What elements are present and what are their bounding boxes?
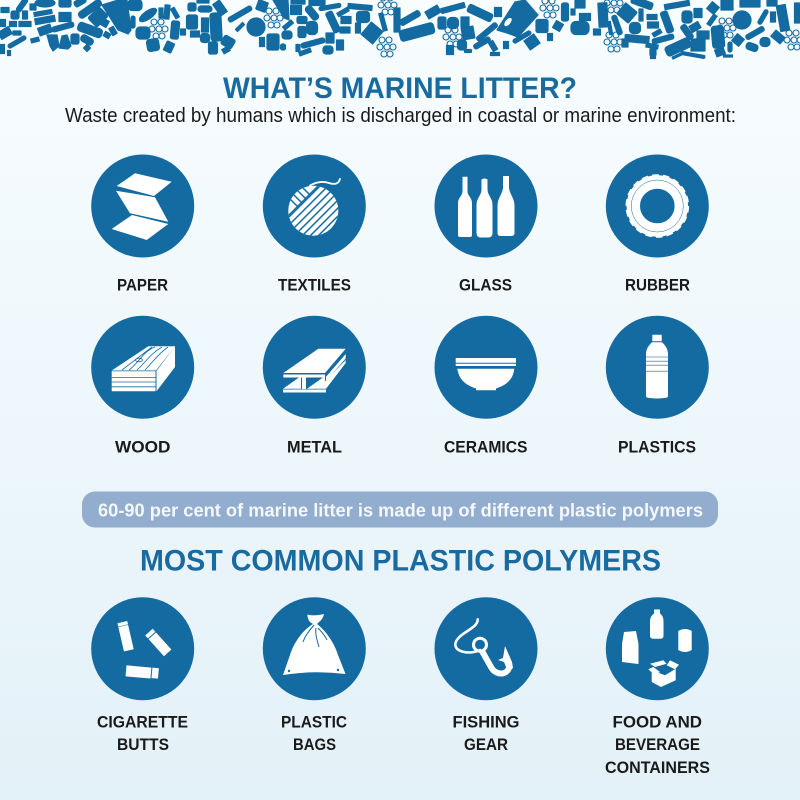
icon: plastic bags bbox=[263, 597, 366, 700]
icon: ceramics bbox=[434, 316, 538, 419]
label: food and beverage containers bbox=[605, 714, 710, 777]
icon: glass bbox=[434, 154, 538, 258]
icon: metal bbox=[263, 316, 366, 419]
icon: textiles bbox=[262, 154, 366, 258]
label: wood: WOOD bbox=[115, 438, 171, 456]
label: glass: GLASS bbox=[459, 276, 512, 294]
label: plastics: PLASTICS bbox=[618, 438, 696, 456]
litter border bbox=[0, 0, 800, 59]
label: cigarette butts: CIGARETTE bbox=[97, 714, 188, 732]
label: fishing gear: GEAR bbox=[464, 736, 508, 754]
label: cigarette butts bbox=[97, 714, 188, 754]
subtitle: Waste created by humans which is discharged in coastal or marine environment: bbox=[65, 105, 736, 127]
callout pill: 60-90 per cent of marine litter is made up of different plastic polymers bbox=[98, 500, 703, 520]
label: plastic bags: BAGS bbox=[293, 736, 336, 754]
icon: fishing gear bbox=[434, 597, 538, 700]
icon: wood bbox=[91, 316, 194, 419]
label: food and beverage containers: CONTAINERS bbox=[605, 759, 710, 777]
label: rubber: RUBBER bbox=[625, 276, 690, 294]
label: food and beverage containers: BEVERAGE bbox=[615, 736, 700, 754]
icon: paper bbox=[91, 154, 194, 258]
icon: rubber bbox=[606, 154, 709, 258]
label: paper: PAPER bbox=[117, 276, 168, 294]
label: food and beverage containers: FOOD AND bbox=[612, 714, 702, 732]
label: fishing gear: FISHING bbox=[452, 714, 520, 732]
heading: polymers: MOST COMMON PLASTIC POLYMERS bbox=[140, 544, 661, 578]
label: metal: METAL bbox=[287, 438, 342, 456]
icon: plastics bbox=[606, 316, 709, 419]
title: WHAT’S MARINE LITTER? bbox=[223, 72, 577, 105]
label: textiles: TEXTILES bbox=[278, 276, 351, 294]
callout pill bbox=[82, 492, 718, 528]
label: ceramics: CERAMICS bbox=[444, 438, 528, 456]
label: plastic bags: PLASTIC bbox=[281, 714, 347, 732]
icon: cigarette butts bbox=[91, 597, 194, 700]
icon: food and beverage containers bbox=[606, 597, 709, 700]
label: fishing gear bbox=[452, 714, 520, 754]
label: plastic bags bbox=[281, 714, 347, 754]
label: cigarette butts: BUTTS bbox=[117, 736, 169, 754]
